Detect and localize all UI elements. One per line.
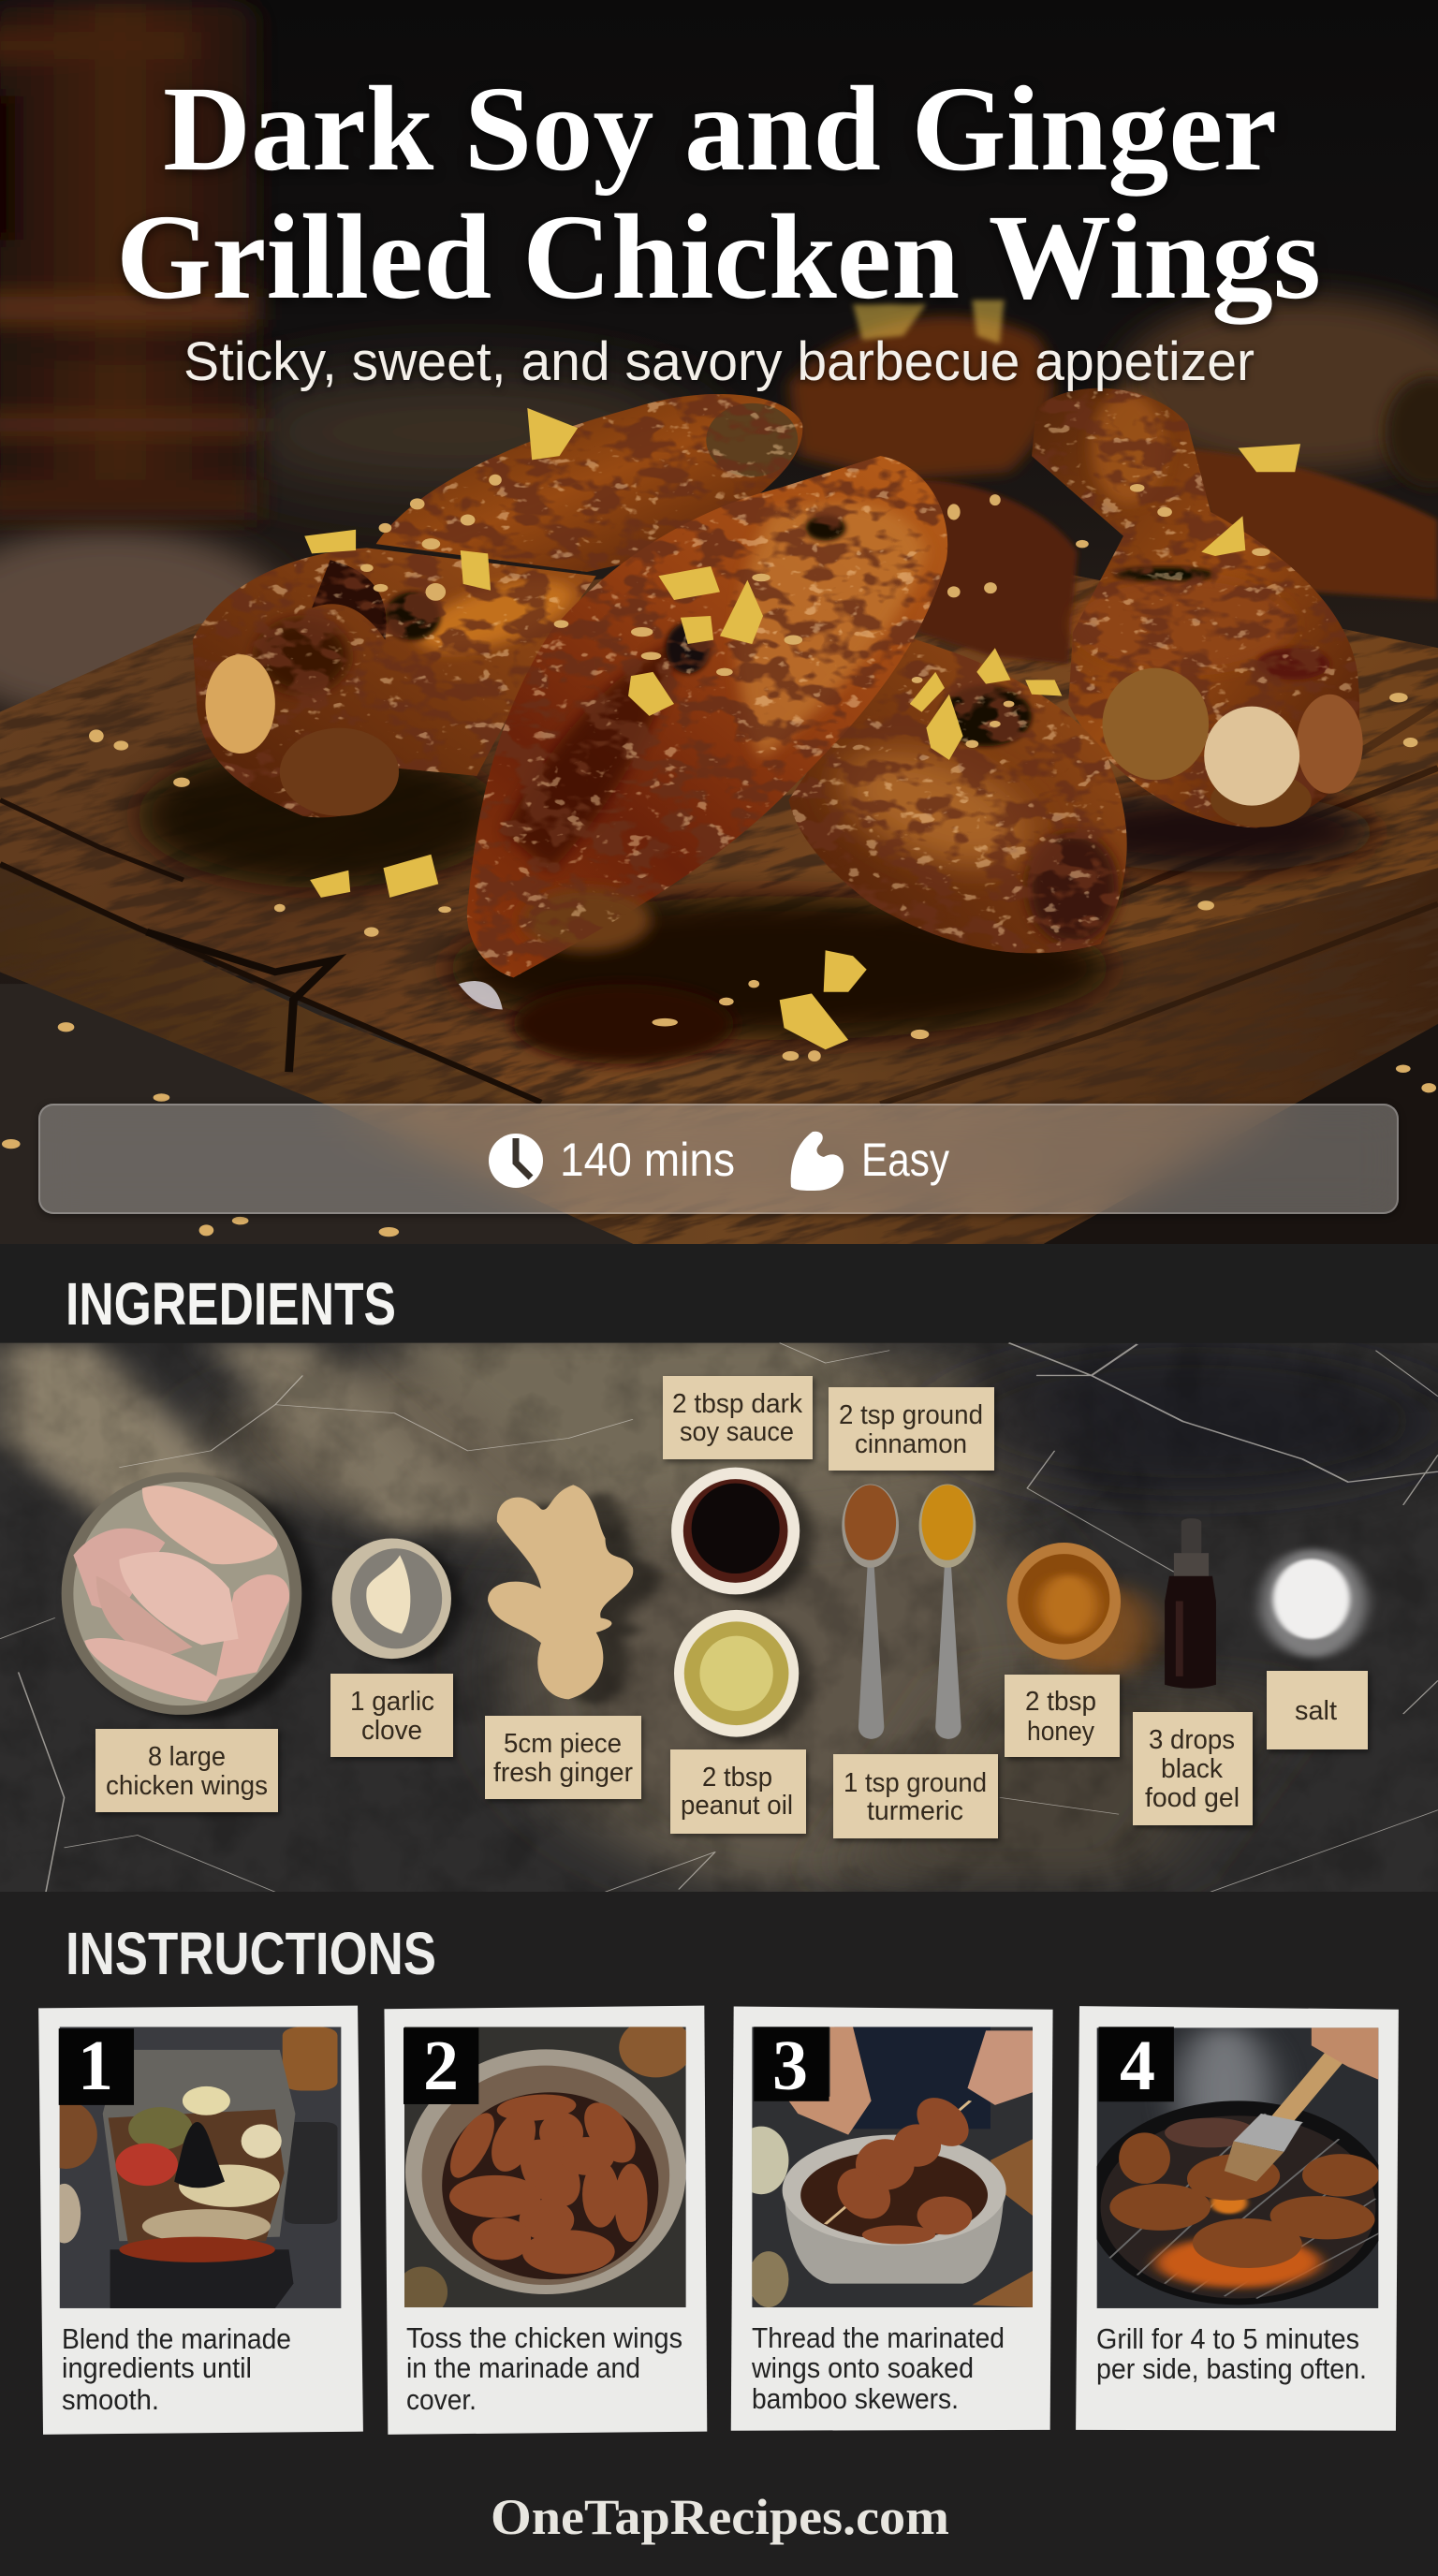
title: Dark Soy and Ginger [163,62,1277,197]
label: garlic: 1 garlic [350,1687,434,1717]
marble veins [0,1343,1438,1892]
label: garlic: clove [361,1716,422,1746]
time text: 140 mins [560,1134,735,1186]
step 3 card [731,2007,1053,2431]
label: turmeric: turmeric [867,1796,963,1826]
marble surface with ingredients [0,1338,1438,1892]
title: Grilled Chicken Wings [116,190,1321,325]
wing: left [193,548,596,817]
label: peanut oil: 2 tbsp [702,1763,772,1793]
label: cinnamon: cinnamon [855,1429,967,1459]
label: honey [1005,1675,1120,1757]
label: food gel: food gel [1145,1783,1240,1813]
label: honey: honey [1027,1717,1094,1747]
step 2 text: Toss the chicken wings [406,2321,682,2354]
step number 2: 2 [423,2027,459,2105]
step 4 text: per side, basting often. [1096,2352,1367,2385]
photo: bowl of wings [404,2027,686,2307]
label: salt: salt [1295,1696,1337,1726]
wing: right [1073,392,1329,680]
label: soy sauce: 2 tbsp dark [672,1389,802,1419]
footer website: OneTapRecipes.com [491,2489,949,2545]
glaze creases and highlights [193,389,1359,976]
step number 4: 4 [1120,2027,1155,2105]
step 3 text: wings onto soaked [751,2351,974,2384]
difficulty text: Easy [861,1134,949,1186]
exposed knuckles on drumettes [205,654,1363,827]
heading: instructions: INSTRUCTIONS [66,1920,436,1987]
step 4 card [1076,2006,1399,2431]
step 3 text: bamboo skewers. [752,2382,959,2415]
panel: ingredients [0,1270,1438,1892]
label: peanut oil [670,1749,806,1834]
bowl of peanut oil [674,1610,812,1744]
label: chicken wings [95,1729,278,1812]
garlic on dish [332,1539,464,1663]
label: soy sauce: soy sauce [680,1417,794,1447]
label: salt [1267,1671,1368,1749]
photo: threading skewers [734,2027,1033,2307]
step 2 card [384,2006,707,2435]
photo: grilling and basting [1087,2025,1389,2308]
label: turmeric [833,1754,998,1838]
step number 1: 1 [78,2027,113,2105]
panel: time and difficulty bar [38,1104,1399,1214]
step 2 text [406,2321,682,2416]
jar of honey [1007,1543,1155,1676]
spoon of cinnamon [842,1485,899,1739]
step 1 card [35,2006,363,2435]
ginger bits [304,300,1300,1049]
heading: ingredients: INGREDIENTS [66,1270,396,1338]
step 1 text [62,2322,291,2416]
wing: lower middle [788,636,1127,953]
label: garlic [330,1674,453,1757]
sauce pools [138,744,505,888]
title [116,62,1321,325]
label: peanut oil: peanut oil [681,1791,793,1821]
panel: hero photo with title [0,0,1438,1244]
icon: clock [489,1134,543,1188]
label: food gel [1133,1712,1253,1825]
step 1 text: ingredients until [62,2351,252,2384]
sesame seeds [2,475,1436,1237]
label: ginger [485,1716,641,1799]
label: chicken wings: 8 large [148,1742,226,1772]
step 1 text: smooth. [62,2383,159,2416]
label: soy sauce [663,1376,813,1459]
cutting board [0,575,1438,1244]
bowl of soy sauce [671,1468,814,1602]
subtitle: Sticky, sweet, and savory barbecue appetizer [183,331,1255,392]
wing: main centre [467,456,947,977]
step 1 text: Blend the marinade [62,2322,291,2355]
label: turmeric: 1 tsp ground [844,1768,987,1798]
ginger root [488,1485,661,1705]
step 3 text [751,2321,1005,2415]
label: cinnamon [829,1387,994,1471]
label: chicken wings: chicken wings [106,1771,268,1801]
step number 3: 3 [772,2027,808,2105]
label: food gel: 3 drops [1149,1725,1235,1755]
background wings [376,316,1438,828]
bottle of black food gel [1165,1518,1216,1689]
spoon of turmeric [919,1485,976,1739]
step 2 text: in the marinade and [406,2351,640,2384]
plate of raw chicken wings [62,1472,317,1720]
hero background scene [0,0,1438,1244]
panel: instructions [38,1920,1399,2545]
label: honey: 2 tbsp [1025,1687,1096,1717]
label: food gel: black [1161,1754,1223,1784]
step 4 text: Grill for 4 to 5 minutes [1096,2322,1359,2355]
label: cinnamon: 2 tsp ground [839,1400,983,1430]
label: ginger: fresh ginger [493,1758,633,1788]
step 2 text: cover. [406,2383,477,2416]
icon: flexed arm [791,1132,844,1191]
pepper mill [0,0,257,520]
step 4 text [1096,2322,1367,2385]
photo: blender [35,2027,341,2308]
pile of salt [1260,1549,1367,1658]
step 3 text: Thread the marinated [752,2321,1005,2354]
ingredient labels [95,1376,1368,1838]
label: ginger: 5cm piece [504,1729,622,1759]
